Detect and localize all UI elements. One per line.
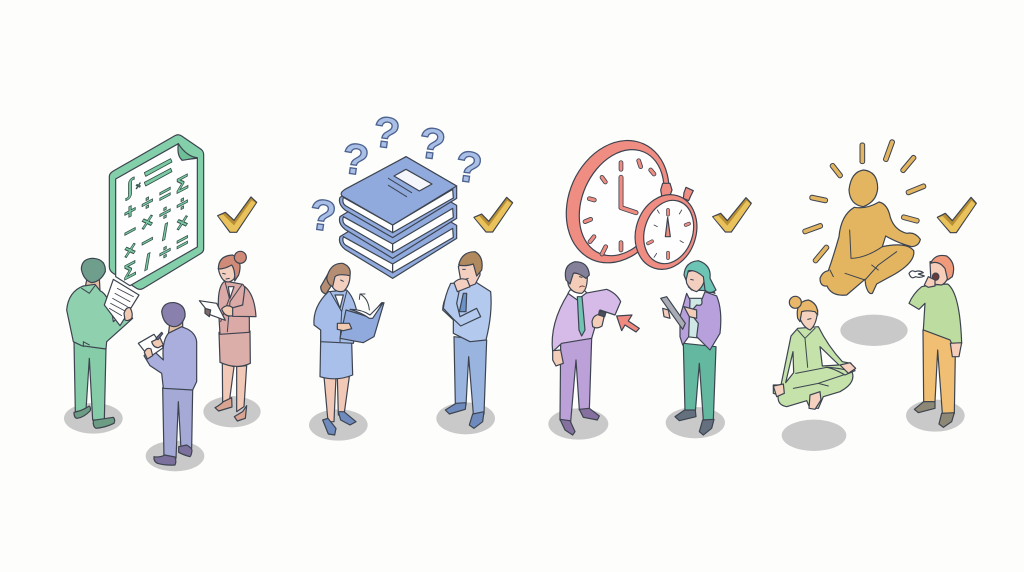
icon: formula sheet: ÷ [177, 189, 188, 218]
floor shadows [548, 407, 725, 440]
question marks: ? [370, 108, 403, 159]
icon: formula sheet: = [159, 179, 171, 209]
icon: formula sheet: = [176, 227, 188, 257]
icon: formula sheet: ÷ [159, 237, 171, 267]
figure: man in green holding a checklist [67, 258, 139, 428]
figure: man checking his watch [552, 262, 621, 435]
question marks: ? [306, 191, 339, 242]
panel: relaxation group [773, 139, 976, 451]
figure: man yawning [909, 255, 962, 427]
icon: check mark [937, 197, 976, 233]
icon: formula sheet: ÷ [142, 188, 153, 217]
figure: woman with a tablet [661, 261, 721, 435]
question marks: ? [416, 119, 448, 170]
figure: woman meditating [773, 296, 856, 409]
figure: man thinking [443, 252, 491, 428]
panel: time pressure group [547, 124, 751, 440]
icon: formula sheet: − [141, 226, 153, 256]
icon: formula sheet: ∫ [125, 173, 135, 201]
icon: check mark [713, 198, 751, 232]
floor shadows [782, 315, 965, 451]
icon: formula sheet [109, 135, 204, 289]
icon: formula sheet: × [141, 207, 153, 237]
figure: woman reading a book [314, 263, 384, 435]
question marks [306, 108, 485, 242]
question marks: ? [452, 142, 485, 193]
figure: woman in pink with a clipboard [199, 251, 256, 421]
icon: meditating gold figure [820, 170, 920, 295]
icon: formula sheet: / [144, 249, 150, 275]
icon: formula sheet: × [124, 235, 136, 265]
figure: man in lavender writing on a pad [138, 303, 197, 465]
icon: check mark [474, 197, 513, 232]
icon: wall clock [547, 124, 688, 279]
icon: formula sheet: Σ [124, 255, 136, 285]
panel: study group [306, 108, 513, 441]
panel: mathematics group [64, 135, 261, 471]
floor shadows [64, 396, 261, 471]
icon: formula sheet: × [136, 180, 141, 192]
icon: formula sheet: + [124, 196, 136, 226]
icon: formula sheet: × [176, 208, 188, 238]
icon: check mark [218, 197, 257, 232]
question marks: ? [339, 135, 372, 186]
icon: stopwatch [626, 183, 706, 277]
icon: stack of books [339, 157, 457, 278]
floor shadows [309, 402, 495, 441]
icon: formula sheet: Σ [176, 169, 189, 199]
icon: formula sheet: ÷ [159, 198, 171, 227]
icon: red arrow [617, 315, 639, 332]
icon: formula sheet: − [124, 216, 136, 246]
icon: radiating rays [802, 139, 926, 264]
icon: formula sheet: / [162, 219, 168, 245]
